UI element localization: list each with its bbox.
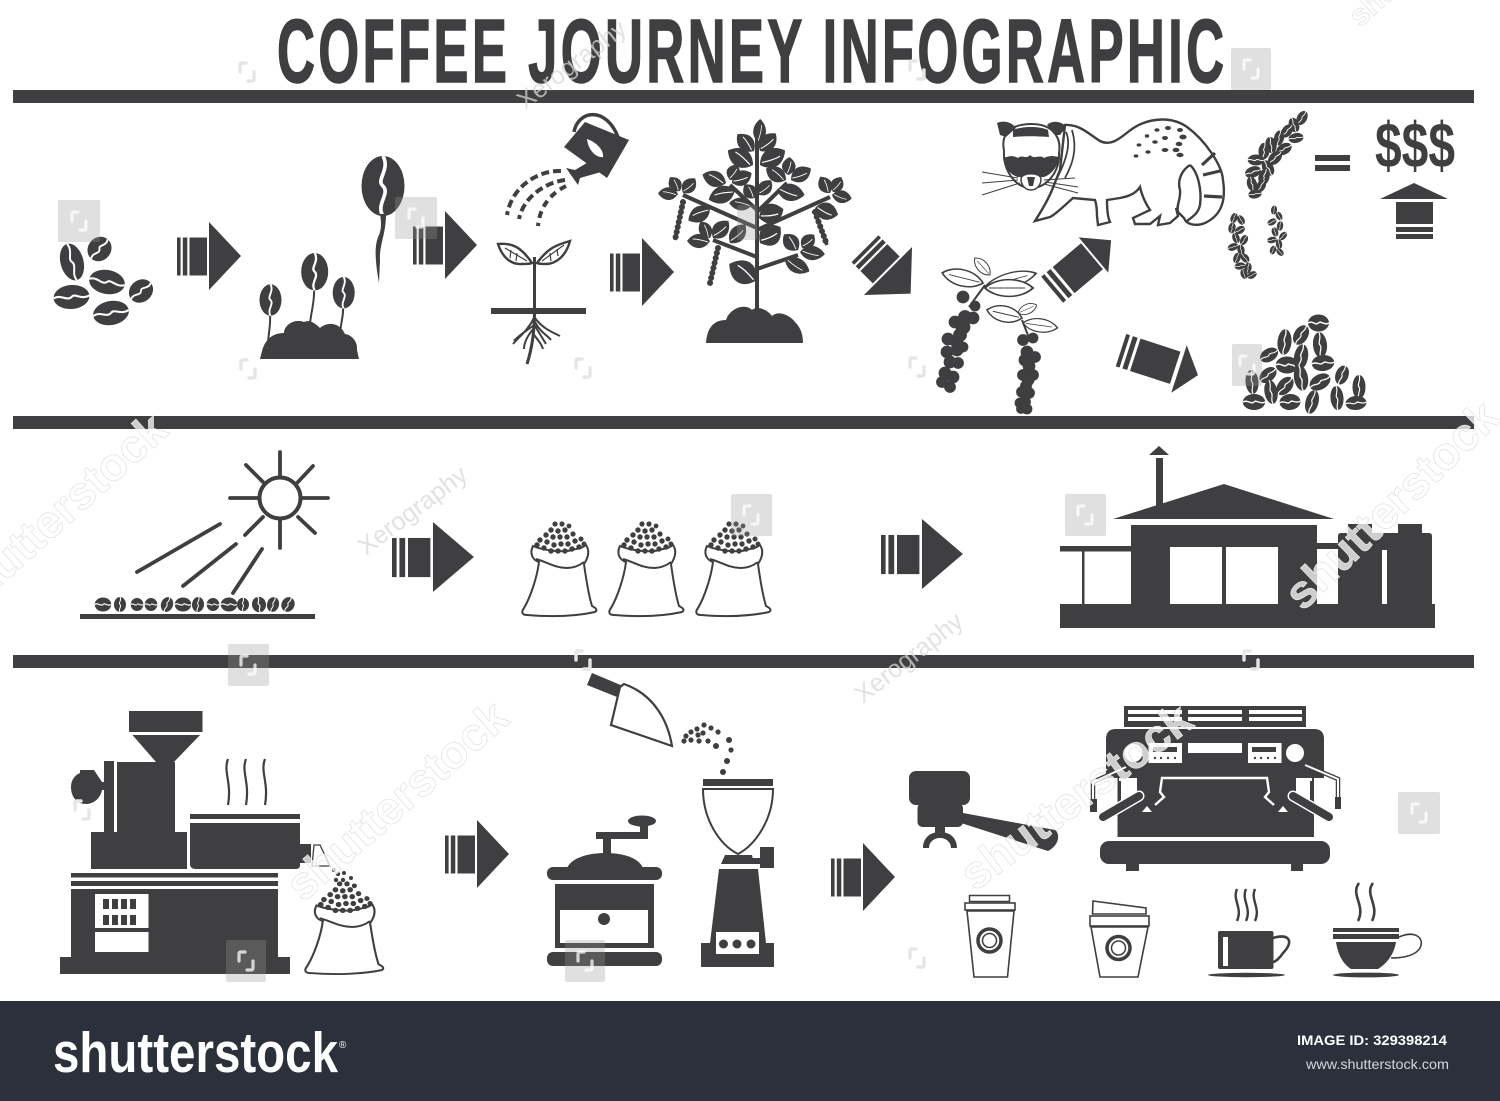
icon: steaming teacup on saucer	[1333, 883, 1421, 977]
arrow	[392, 522, 474, 592]
divider bars	[13, 90, 1474, 668]
watermark text: shutterstock	[275, 690, 518, 911]
icon: lower bean chains	[1227, 205, 1289, 280]
up arrow	[1380, 183, 1448, 239]
arrow: up to civet	[1037, 223, 1126, 307]
icon: sprouting seedlings in soil	[260, 253, 359, 359]
watermark text: Xerography	[849, 607, 969, 709]
icon: scoop pouring beans	[587, 673, 734, 775]
panel: growing row	[53, 109, 1455, 415]
icon: coffee beans	[53, 232, 158, 328]
arrow	[831, 843, 895, 911]
panel: roasting and brewing row	[60, 673, 1421, 977]
footer logo: shutterstock	[53, 1021, 338, 1085]
site url: www.shutterstock.com	[1305, 1056, 1449, 1072]
icon: espresso machine	[1090, 706, 1341, 871]
icon: portafilter	[909, 771, 1058, 851]
icon: takeaway cup tall	[965, 896, 1015, 977]
watermark text: Xerography	[512, 14, 632, 115]
icon: three sacks of beans	[522, 521, 770, 616]
icon: watering can	[507, 115, 629, 226]
icon: civet	[982, 120, 1224, 225]
icon: pile of coffee beans	[1243, 314, 1367, 415]
watermark tiles	[58, 48, 1440, 982]
arrow	[881, 519, 963, 589]
icon: coffee tree	[658, 119, 853, 343]
icon: factory building	[1060, 446, 1435, 628]
icon: steaming mug on saucer	[1208, 889, 1289, 977]
arrow	[445, 820, 509, 888]
panel: drying and processing row	[80, 446, 1435, 628]
icon: coffee branches with cherries	[937, 254, 1058, 414]
watermark text: shutterstock	[950, 692, 1202, 900]
arrow	[177, 222, 241, 290]
icon: germinating bean	[362, 156, 404, 283]
title: COFFEE JOURNEY INFOGRAPHIC	[277, 0, 1224, 102]
arrow	[841, 224, 935, 318]
icon: civet coffee bean chain	[1243, 109, 1310, 200]
arrow	[413, 211, 477, 279]
icon: hand coffee mill	[547, 816, 662, 966]
icon: coffee roaster	[60, 711, 330, 974]
arrow	[610, 238, 674, 306]
image id: IMAGE ID: 329398214	[1297, 1032, 1447, 1048]
icon: sack catching roasted beans	[305, 868, 383, 974]
dollar signs: $$$	[1375, 109, 1455, 181]
icon: sapling with roots	[491, 241, 586, 364]
icon: takeaway cup short	[1090, 901, 1149, 977]
equals sign	[1315, 155, 1350, 171]
arrow: down to bean pile	[1113, 326, 1206, 399]
icon: sun drying beans	[80, 452, 328, 619]
icon: electric grinder	[701, 779, 774, 967]
watermark text: Xerography	[353, 460, 473, 561]
registered mark: ®	[339, 1040, 347, 1051]
footer bar	[0, 1001, 1500, 1101]
